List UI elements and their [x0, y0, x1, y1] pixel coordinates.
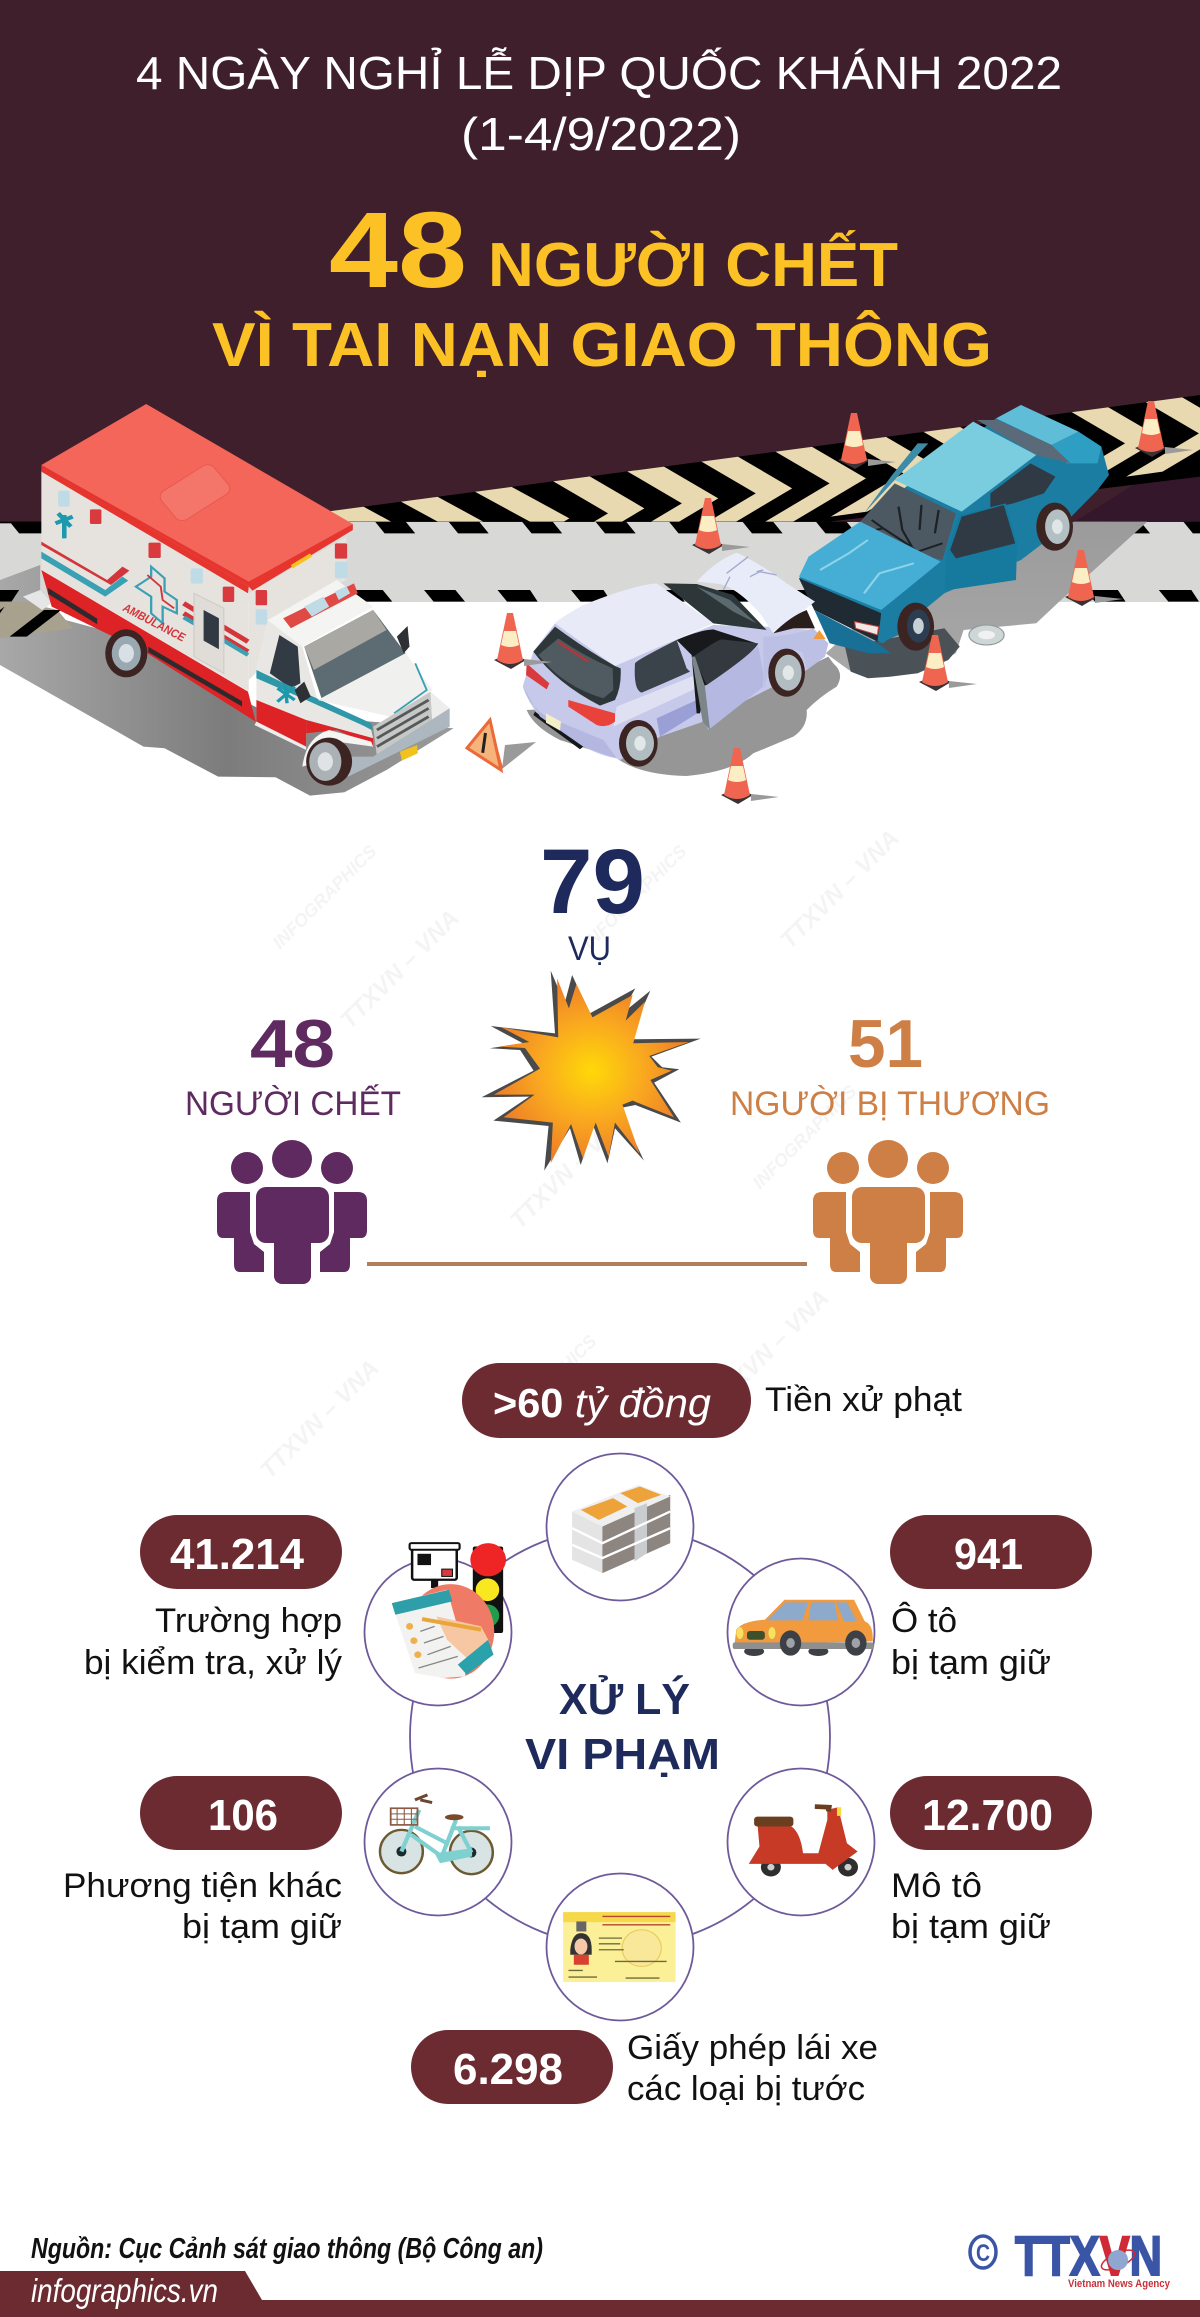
watermarks: INFOGRAPHICS [269, 841, 380, 953]
circle: traffic check [364, 1543, 512, 1706]
icon: money stacks [572, 1485, 670, 1573]
traffic cones [494, 401, 1193, 804]
footer site name: infographics.vn [31, 2272, 218, 2309]
violations centre title: VI PHẠM [525, 1730, 720, 1779]
accident scene illustration [0, 380, 1200, 804]
pill: fine total: >60 tỷ đồng [493, 1380, 711, 1426]
label: other vehicles: bị tạm giữ [182, 1908, 342, 1946]
title: date line: 4 NGÀY NGHỈ LỄ DỊP QUỐC KHÁNH 2022 [136, 47, 1062, 99]
ambulance shadow [0, 565, 453, 796]
explosion icon [482, 971, 701, 1171]
circle: licence [546, 1874, 694, 2020]
stat: 48 deaths [185, 1006, 401, 1123]
label: cars [891, 1602, 1051, 1682]
circle: scooter [728, 1768, 874, 1916]
label: other vehicles [63, 1867, 342, 1946]
icon: people group orange [813, 1140, 963, 1284]
circle: money [546, 1454, 694, 1600]
blue car [799, 405, 1109, 653]
label: inspected cases: Trường hợp [155, 1602, 342, 1640]
icon: orange car [733, 1600, 874, 1656]
warning triangle [467, 720, 536, 770]
title: date range: (1-4/9/2022) [461, 108, 741, 160]
watermarks: TTXVN – VNA [705, 1285, 835, 1414]
watermarks: TTXVN – VNA [335, 905, 465, 1034]
pill: fine total [462, 1363, 751, 1438]
pill: 12.700: 12.700 [922, 1791, 1053, 1840]
stat: 51 injured [730, 1006, 1050, 1123]
logo: TTXVN: C [976, 2240, 990, 2267]
icon: scooter [749, 1807, 858, 1877]
source line: Nguồn: Cục Cảnh sát giao thông (Bộ Công an) [31, 2233, 543, 2265]
connecting line [367, 1262, 807, 1266]
chevron barrier band [0, 395, 1200, 524]
road [0, 522, 1200, 602]
label: motorbikes: Mô tô [891, 1867, 982, 1905]
watermarks: INFOGRAPHICS [579, 841, 690, 953]
label: licences: các loại bị tước [627, 2070, 865, 2108]
icon: people group purple [217, 1140, 367, 1284]
headline first line: NGƯỜI CHẾT [488, 231, 898, 300]
logo: TTXVN: Vietnam News Agency [1068, 2278, 1171, 2290]
dark header background [0, 0, 1200, 522]
watermarks: INFOGRAPHICS [489, 1331, 600, 1443]
headline second line: VÌ TAI NẠN GIAO THÔNG [212, 311, 992, 380]
label: cars: bị tạm giữ [891, 1644, 1051, 1682]
violations centre title [525, 1673, 720, 1779]
pill: 41.214 [140, 1515, 342, 1589]
51 number: 51 [848, 1006, 923, 1082]
icon: driving licence [563, 1912, 676, 1982]
watermarks: TTXVN – VNA [505, 1105, 635, 1234]
label: motorbikes [891, 1867, 1051, 1946]
violations centre title: XỬ LÝ [559, 1673, 690, 1724]
label: inspected cases [84, 1602, 342, 1682]
footer band [0, 2271, 1200, 2317]
pill: 41.214: 41.214 [170, 1530, 305, 1579]
48 number: 48 [250, 1006, 335, 1082]
pill: 941: 941 [954, 1530, 1023, 1579]
79 number: 79 [540, 831, 645, 933]
pill: 6.298: 6.298 [453, 2045, 563, 2094]
headline number: 48 [329, 189, 467, 310]
watermarks: TTXVN – VNA [255, 1355, 385, 1484]
blue car shadow [826, 522, 1147, 678]
ambulance: AMBULANCE [120, 601, 188, 644]
label: inspected cases: bị kiểm tra, xử lý [84, 1644, 342, 1682]
label: fine total: Tiền xử phạt [765, 1381, 963, 1419]
label: licences: Giấy phép lái xe [627, 2029, 878, 2067]
watermarks [255, 825, 905, 1484]
pill: 106 [140, 1776, 342, 1850]
injured label: NGƯỜI BỊ THƯƠNG [730, 1085, 1050, 1123]
ambulance [41, 404, 450, 786]
pill: 12.700 [890, 1776, 1092, 1850]
deaths label: NGƯỜI CHẾT [185, 1085, 401, 1123]
icon: traffic light and clipboard [392, 1543, 506, 1679]
white car shadow [527, 657, 840, 776]
label: other vehicles: Phương tiện khác [63, 1867, 342, 1905]
label: licences [627, 2029, 878, 2108]
icon: bicycle [380, 1795, 493, 1874]
circle: bicycle [364, 1768, 512, 1916]
circle: car [728, 1558, 874, 1706]
pill: 106: 106 [208, 1791, 278, 1840]
watermarks: TTXVN – VNA [775, 825, 905, 954]
pill: 941 [890, 1515, 1092, 1589]
logo: TTXVN: TTXVN [1015, 2224, 1162, 2287]
pill: 6.298 [411, 2030, 613, 2104]
label: cars: Ô tô [891, 1602, 957, 1640]
stat: 79 accidents [540, 831, 645, 968]
watermarks: INFOGRAPHICS [749, 1081, 860, 1193]
accidents unit: VỤ [568, 930, 611, 968]
white car [523, 553, 828, 767]
label: motorbikes: bị tạm giữ [891, 1908, 1051, 1946]
violations ring [410, 1527, 830, 1947]
